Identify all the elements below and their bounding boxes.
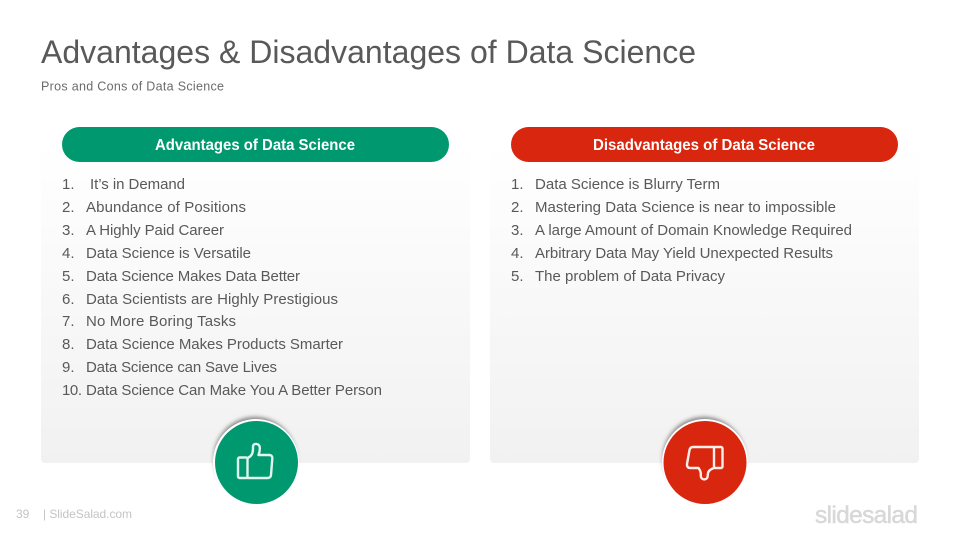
icon: thumbs up [213,417,299,505]
list: advantages: 2. [62,199,75,216]
list: advantages: 10. [62,382,82,399]
heading: disadvantages: Disadvantages of Data Science [593,137,815,154]
list: advantages: 8. [62,336,75,353]
list: advantages: No More Boring Tasks [86,313,236,330]
footer brand text: | SlideSalad.com [43,507,132,521]
list: disadvantages: 5. [511,268,524,285]
list: disadvantages: Arbitrary Data May Yield Unexpected Results [535,245,833,262]
subtitle: Pros and Cons of Data Science [41,80,224,94]
list: advantages: 7. [62,313,75,330]
list: advantages: Data Science Makes Data Better [86,268,300,285]
panel: disadvantages [490,127,919,505]
list: advantages [62,176,382,399]
heading: advantages: Advantages of Data Science [155,137,355,154]
list: disadvantages: Data Science is Blurry Term [535,176,720,193]
list: disadvantages: A large Amount of Domain Knowledge Required [535,222,852,239]
list: advantages: 1. [62,176,75,193]
list: disadvantages: 1. [511,176,524,193]
list: advantages: 3. [62,222,75,239]
list: disadvantages: 4. [511,245,524,262]
list: advantages: Data Science can Save Lives [86,359,277,376]
title: Advantages & Disadvantages of Data Science [41,34,696,70]
list: advantages: A Highly Paid Career [86,222,224,239]
panel background: advantages [41,145,470,463]
heading: disadvantages [511,127,898,162]
list: disadvantages: Mastering Data Science is near to impossible [535,199,836,216]
list: advantages: 4. [62,245,75,262]
list: disadvantages [511,176,852,285]
panel background: disadvantages [490,145,919,463]
icon: thumbs down [662,417,748,505]
list: advantages: Abundance of Positions [86,199,246,216]
list: advantages: 9. [62,359,75,376]
list: disadvantages: The problem of Data Privacy [535,268,726,285]
panel: advantages [41,127,470,505]
list: advantages: 5. [62,268,75,285]
logo: slidesalad: slidesalad [815,502,918,529]
list: advantages: 6. [62,291,75,308]
list: advantages: Data Science Makes Products Smarter [86,336,343,353]
list: advantages: It’s in Demand [90,176,185,193]
list: advantages: Data Scientists are Highly Prestigious [86,291,338,308]
list: advantages: Data Science Can Make You A Better Person [86,382,382,399]
heading: advantages [62,127,449,162]
list: advantages: Data Science is Versatile [86,245,251,262]
list: disadvantages: 3. [511,222,524,239]
page number: 39 [16,507,30,521]
list: disadvantages: 2. [511,199,524,216]
